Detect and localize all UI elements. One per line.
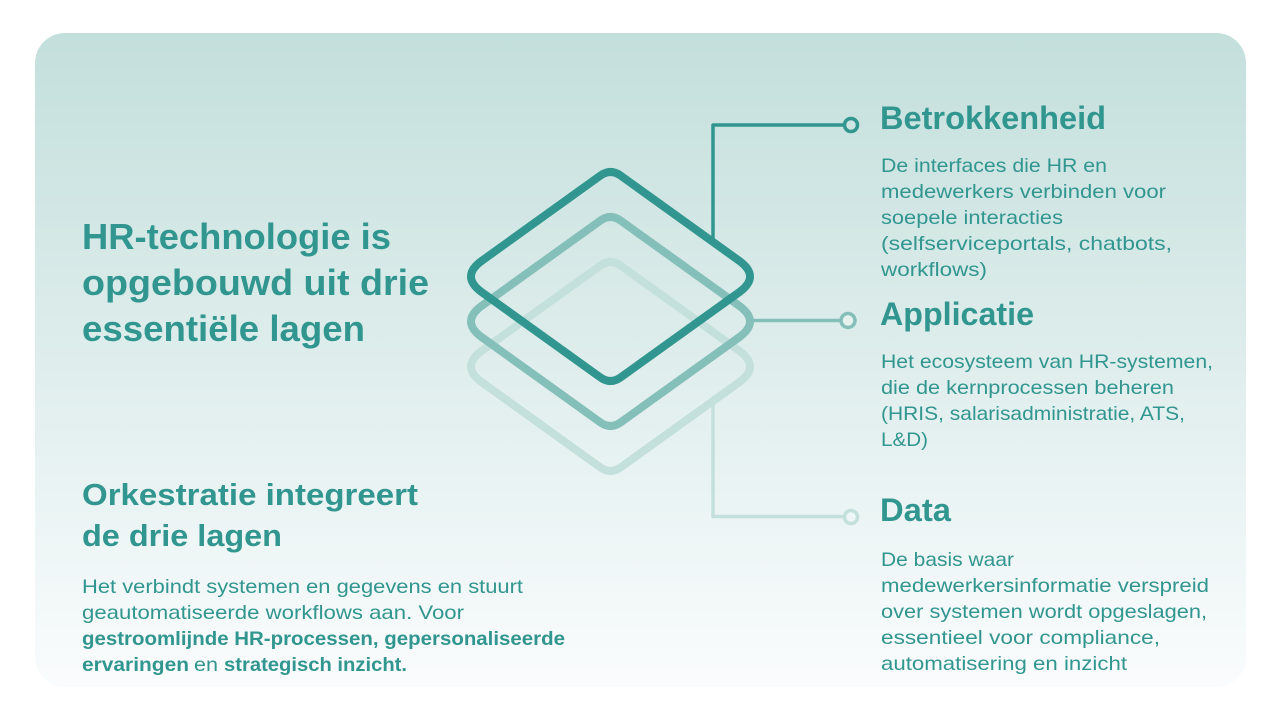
text block: applicatie: Het ecosysteem van HR-systemen, xyxy=(881,351,1213,373)
layer: applicatie diamond xyxy=(471,217,750,426)
title: essentiële lagen xyxy=(82,308,365,349)
text block: applicatie: L&D) xyxy=(881,429,928,451)
text block: betrokkenheid: (selfserviceportals, chatbots, xyxy=(881,233,1172,255)
connector: applicatie xyxy=(752,314,855,328)
text block: orkestratie: geautomatiseerde workflows aan. Voor xyxy=(82,602,465,624)
text block: data: essentieel voor compliance, xyxy=(881,627,1160,649)
text block: orkestratie xyxy=(82,576,565,676)
heading: data: Data xyxy=(880,492,951,528)
text block: betrokkenheid xyxy=(880,155,1172,281)
heading: applicatie: Applicatie xyxy=(880,296,1034,332)
heading: orkestratie xyxy=(82,477,418,553)
text block: orkestratie: ervaringen xyxy=(82,654,189,676)
title: opgebouwd uit drie xyxy=(82,262,429,303)
text block: data: medewerkersinformatie verspreid xyxy=(881,575,1209,597)
layer: betrokkenheid diamond xyxy=(471,172,750,381)
text block: data: over systemen wordt opgeslagen, xyxy=(881,601,1207,623)
title xyxy=(82,216,429,349)
text block: betrokkenheid: workflows) xyxy=(880,259,987,281)
title: HR-technologie is xyxy=(82,216,391,257)
text block: applicatie: die de kernprocessen beheren xyxy=(881,377,1174,399)
text block: betrokkenheid: soepele interacties xyxy=(881,207,1063,229)
heading: betrokkenheid: Betrokkenheid xyxy=(880,100,1106,136)
text block: betrokkenheid: medewerkers verbinden voor xyxy=(881,181,1167,203)
text block: data xyxy=(881,549,1209,675)
text block: orkestratie: gestroomlijnde HR-processen, gepersonaliseerde xyxy=(82,628,565,650)
text block: data: De basis waar xyxy=(881,549,1015,571)
layer: data diamond xyxy=(471,262,750,471)
heading: orkestratie: de drie lagen xyxy=(82,518,282,553)
heading: orkestratie: Orkestratie integreert xyxy=(82,477,418,512)
text block: betrokkenheid: De interfaces die HR en xyxy=(881,155,1107,177)
text block: orkestratie: Het verbindt systemen en gegevens en stuurt xyxy=(82,576,524,598)
text block: orkestratie: en xyxy=(194,654,218,676)
connector: betrokkenheid xyxy=(713,118,858,240)
text block: applicatie: (HRIS, salarisadministratie, ATS, xyxy=(881,403,1185,425)
text block: applicatie xyxy=(881,351,1213,451)
text block: orkestratie: strategisch inzicht. xyxy=(224,654,407,676)
connector: data xyxy=(713,404,858,524)
text block: data: automatisering en inzicht xyxy=(881,653,1128,675)
